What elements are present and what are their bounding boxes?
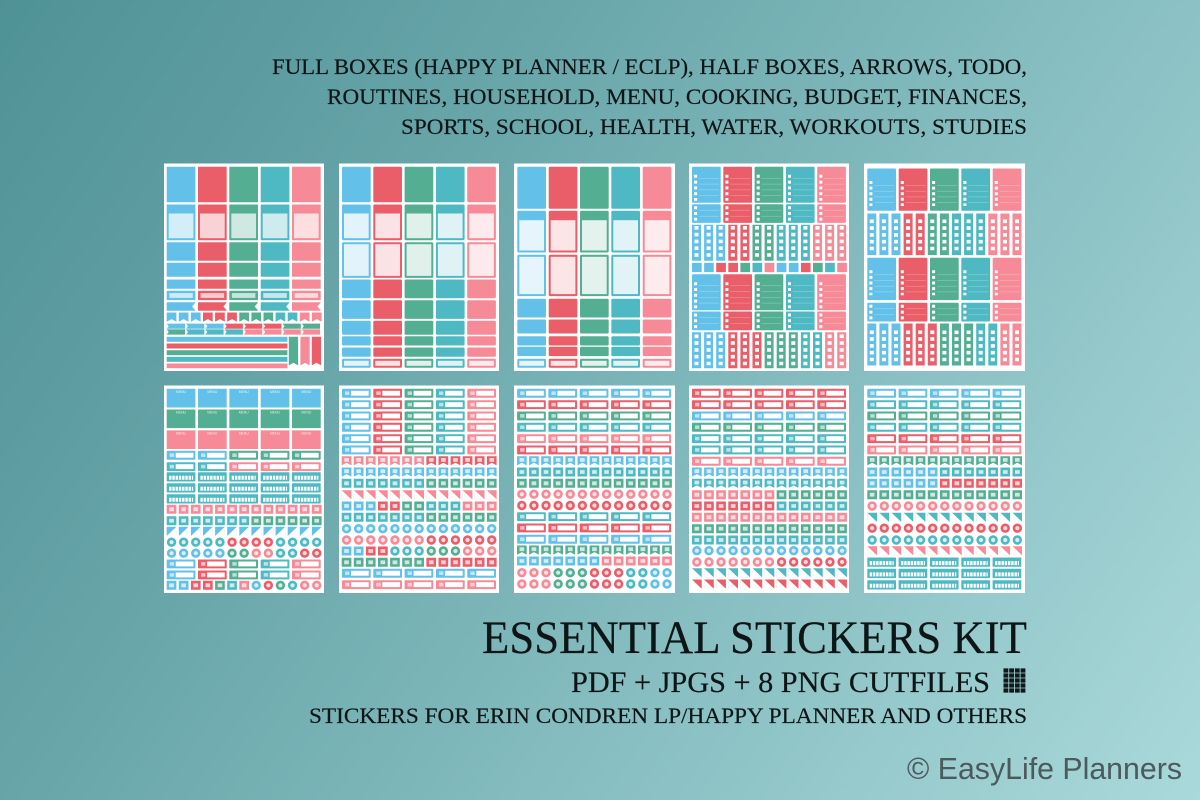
menu boxes: MENU xyxy=(176,390,187,394)
heading: feature list: SPORTS, SCHOOL, HEALTH, WATER, WORKOUTS, STUDIES xyxy=(401,114,1027,139)
menu boxes: MENU xyxy=(207,432,218,436)
labels xyxy=(867,389,1021,454)
icon tile rows xyxy=(517,460,672,506)
subtitle: file formats: PDF + JPGS + 8 PNG CUTFILES xyxy=(571,666,990,699)
menu boxes: MENU xyxy=(270,411,281,415)
menu boxes: MENU xyxy=(239,390,249,394)
menu boxes: MENU xyxy=(239,411,249,415)
heading: feature list: FULL BOXES (HAPPY PLANNER / ECLP), HALF BOXES, ARROWS, TODO, xyxy=(272,54,1027,79)
labels top xyxy=(517,389,671,454)
tiny tiles xyxy=(692,263,847,272)
labels xyxy=(692,389,846,466)
meal labels xyxy=(167,451,321,471)
icon tile rows xyxy=(342,460,497,562)
labels xyxy=(167,560,321,579)
menu boxes: MENU xyxy=(207,390,218,394)
flag row xyxy=(167,317,322,322)
icon tile rows xyxy=(867,460,1022,555)
arrow rows xyxy=(167,324,321,335)
menu boxes: MENU xyxy=(301,411,312,415)
heading: feature list xyxy=(272,54,1027,139)
heading: feature list: ROUTINES, HOUSEHOLD, MENU, COOKING, BUDGET, FINANCES, xyxy=(327,84,1027,109)
compatibility line: STICKERS FOR ERIN CONDREN LP/HAPPY PLANNER AND OTHERS xyxy=(309,703,1027,728)
sheet 7: household icon stickers xyxy=(339,386,499,593)
icon tile rows xyxy=(167,509,322,553)
menu boxes: MENU xyxy=(301,390,312,394)
title: ESSENTIAL STICKERS KIT xyxy=(482,612,1027,664)
habit strips bottom xyxy=(867,330,1022,364)
sheet 2: framed half boxes xyxy=(339,164,499,371)
labels bottom xyxy=(342,569,496,589)
icon tile rows xyxy=(692,471,847,589)
long bars xyxy=(167,337,287,368)
bookmark ribbons xyxy=(289,337,321,365)
sheet 1: boxes, flags, arrows and bars xyxy=(164,164,324,371)
menu boxes: MENU xyxy=(207,411,218,415)
mixed icon row xyxy=(167,581,321,590)
water trackers xyxy=(867,558,1021,590)
menu boxes xyxy=(167,390,321,440)
icon: cutfile grid xyxy=(1004,670,1026,690)
habit strips middle xyxy=(867,220,1022,252)
menu boxes: MENU xyxy=(270,432,281,436)
habit strips top xyxy=(692,226,847,259)
menu boxes: MENU xyxy=(176,411,187,415)
sheet 9: budget and finance stickers xyxy=(689,386,849,593)
labels top xyxy=(342,389,496,454)
icon tile rows bottom xyxy=(517,549,672,584)
copyright credit: © EasyLife Planners xyxy=(907,751,1182,786)
menu boxes: MENU xyxy=(239,432,249,436)
water trackers xyxy=(167,472,321,504)
sheet 10: health and workout stickers xyxy=(864,386,1025,593)
menu boxes: MENU xyxy=(301,432,312,436)
sheet 3: tall framed boxes xyxy=(514,164,675,371)
sheet 8: contact and study stickers xyxy=(514,386,675,593)
habit strips bottom xyxy=(692,334,847,368)
menu boxes: MENU xyxy=(270,390,281,394)
sheet 6: menu boxes, water trackers, icon stickers xyxy=(164,386,324,593)
labels middle xyxy=(517,512,671,544)
menu boxes: MENU xyxy=(176,432,187,436)
sheet 5: large checklists and habit strips xyxy=(864,164,1025,371)
sheet 4: checklists and habit strips xyxy=(689,164,849,371)
